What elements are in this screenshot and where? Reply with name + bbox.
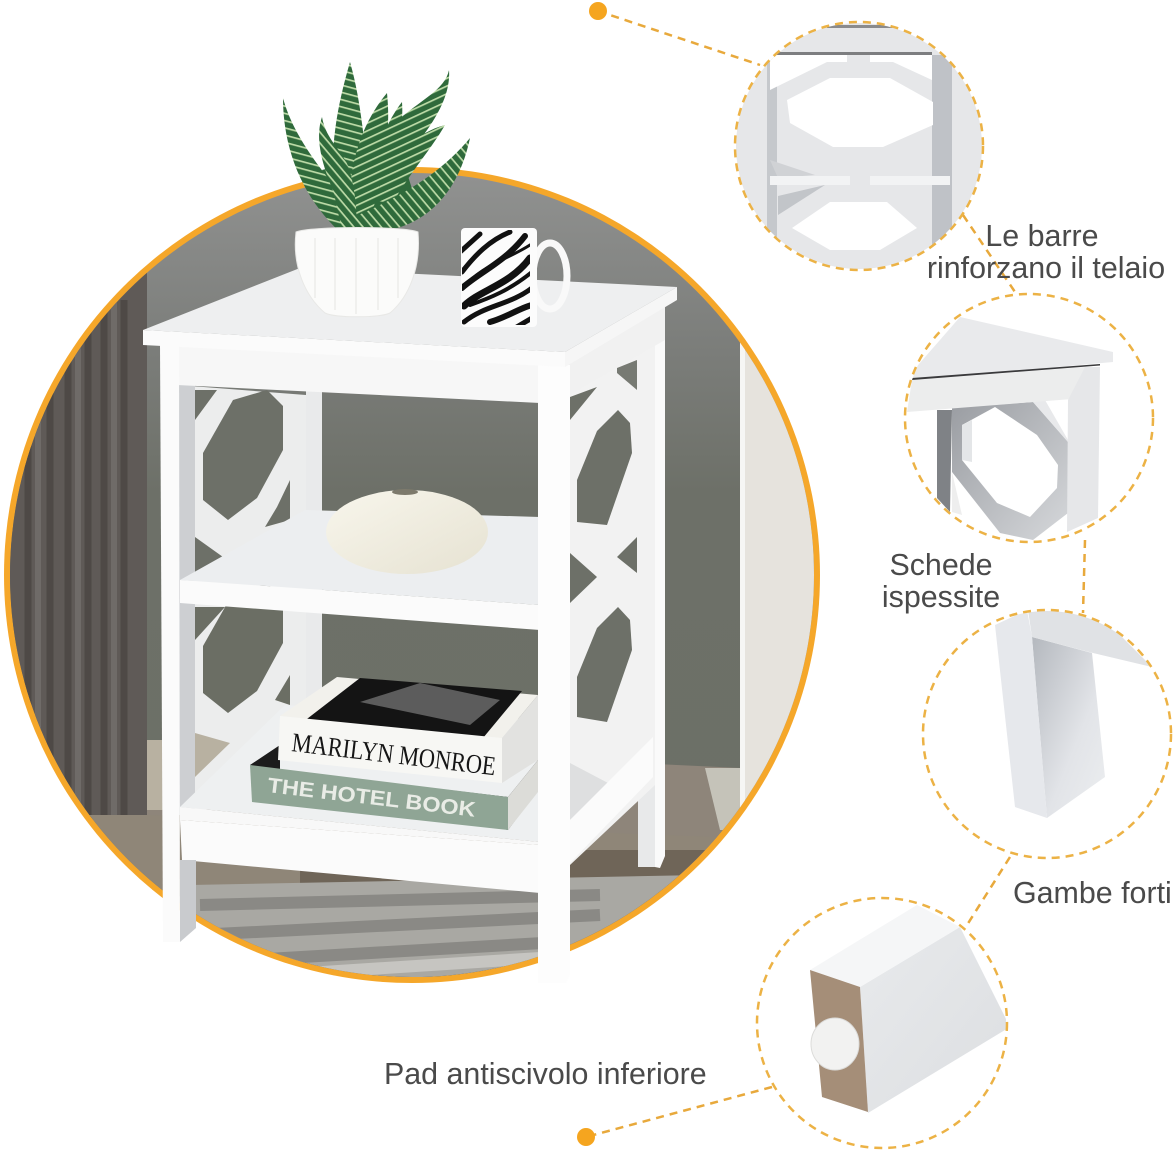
- books: [250, 677, 538, 830]
- textured curtain on the right: [740, 342, 814, 808]
- upper book: [280, 677, 538, 738]
- bottom shelf: [180, 705, 540, 842]
- right side lattice: [570, 345, 655, 865]
- label: thick boards line two: ispessite: [882, 580, 1000, 614]
- illustration: white side table: [143, 268, 677, 983]
- lower book: [250, 745, 538, 830]
- left side lattice: [178, 385, 306, 815]
- label: bars: Le barre: [985, 219, 1099, 253]
- plant in pot: [283, 62, 470, 317]
- detail 4: anti-slip pad: [750, 895, 1015, 1152]
- striped rug: [196, 875, 679, 977]
- front left leg: [180, 860, 196, 942]
- book title: The Hotel Book: THE HOTEL BOOK: [266, 774, 477, 822]
- label: anti-slip pad: Pad antiscivolo inferiore: [384, 1057, 707, 1091]
- floor: [90, 815, 717, 977]
- right back leg: [638, 330, 655, 867]
- label: thick boards: Schede: [889, 548, 993, 582]
- detail 2: thick boards: [900, 290, 1160, 550]
- front right leg: [538, 365, 570, 983]
- marker: bottom orange dot: [577, 1128, 595, 1146]
- book title: Marilyn Monroe: MARILYN MONROE: [290, 727, 497, 781]
- white ceramic vase: [326, 489, 488, 574]
- top rail: [177, 344, 540, 403]
- skirting and lower wall: [147, 764, 740, 849]
- connector: dotted orange lines: [586, 11, 1085, 1137]
- middle shelf: [180, 510, 540, 605]
- zebra mug: [460, 228, 567, 328]
- table top: [143, 268, 677, 352]
- curtain on the left: [0, 260, 147, 820]
- pot: [295, 228, 418, 317]
- detail 1: octagon bars: [730, 15, 990, 275]
- label: bars line two: rinforzano il telaio: [927, 251, 1165, 285]
- label: strong legs: Gambe forti: [1013, 876, 1172, 910]
- detail 3: strong legs: [920, 605, 1175, 865]
- left back leg: [306, 390, 322, 715]
- panel: room scene with orange circle: [0, 160, 830, 1000]
- marker: top orange dot: [589, 2, 607, 20]
